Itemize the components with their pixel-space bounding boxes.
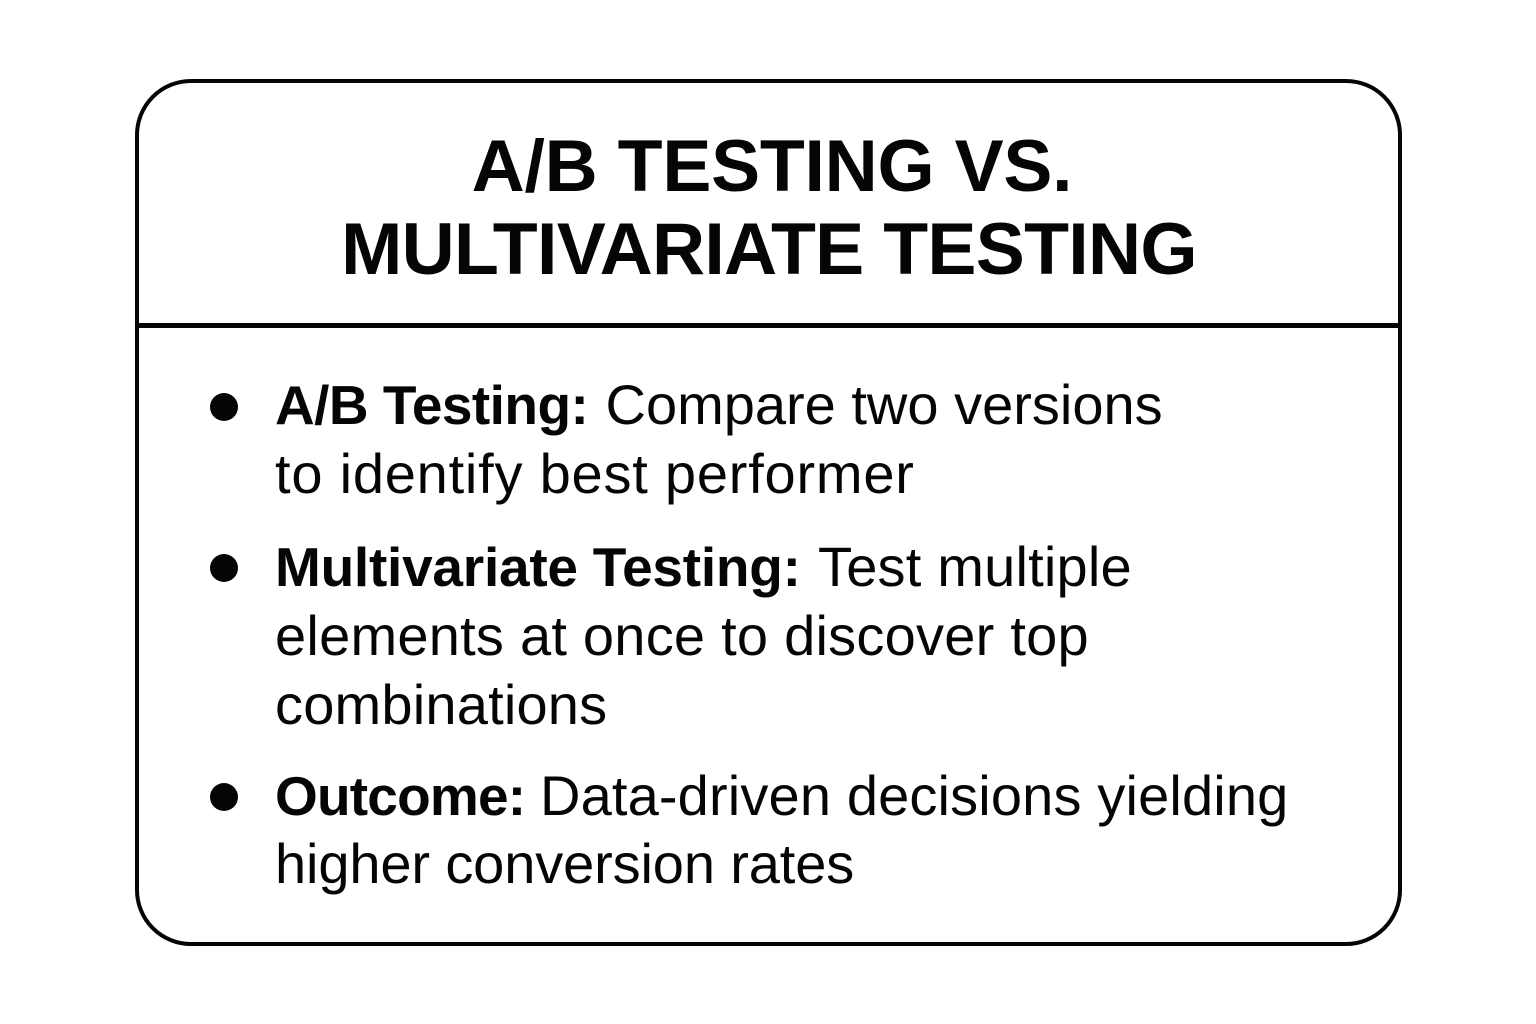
bullet icon: outcome <box>210 782 238 810</box>
text block: A/B testing: to identify best performer <box>275 442 915 505</box>
text block: multivariate testing: combinations <box>275 672 607 736</box>
text block: outcome: Outcome: <box>275 764 525 826</box>
panel: card <box>134 78 1402 946</box>
text block: multivariate testing: elements at once to discover top <box>275 604 1089 666</box>
title: A/B TESTING VS. <box>472 124 1072 207</box>
text block: outcome <box>275 764 1288 894</box>
text block: outcome: Data-driven decisions yielding <box>540 764 1288 826</box>
text block: A/B testing <box>275 372 1163 505</box>
text block: multivariate testing: Multivariate Testing: <box>275 536 801 598</box>
text block: A/B testing: Compare two versions <box>606 372 1163 436</box>
text block: outcome: higher conversion rates <box>275 832 854 894</box>
bullet icon: A/B testing <box>210 392 238 420</box>
title <box>341 124 1197 290</box>
title: MULTIVARIATE TESTING <box>341 207 1197 290</box>
text block: multivariate testing: Test multiple <box>818 534 1132 598</box>
text block: multivariate testing <box>275 534 1132 736</box>
text block: A/B testing: A/B Testing: <box>275 374 588 436</box>
header divider <box>135 323 1401 328</box>
bullet icon: multivariate testing <box>210 554 238 582</box>
